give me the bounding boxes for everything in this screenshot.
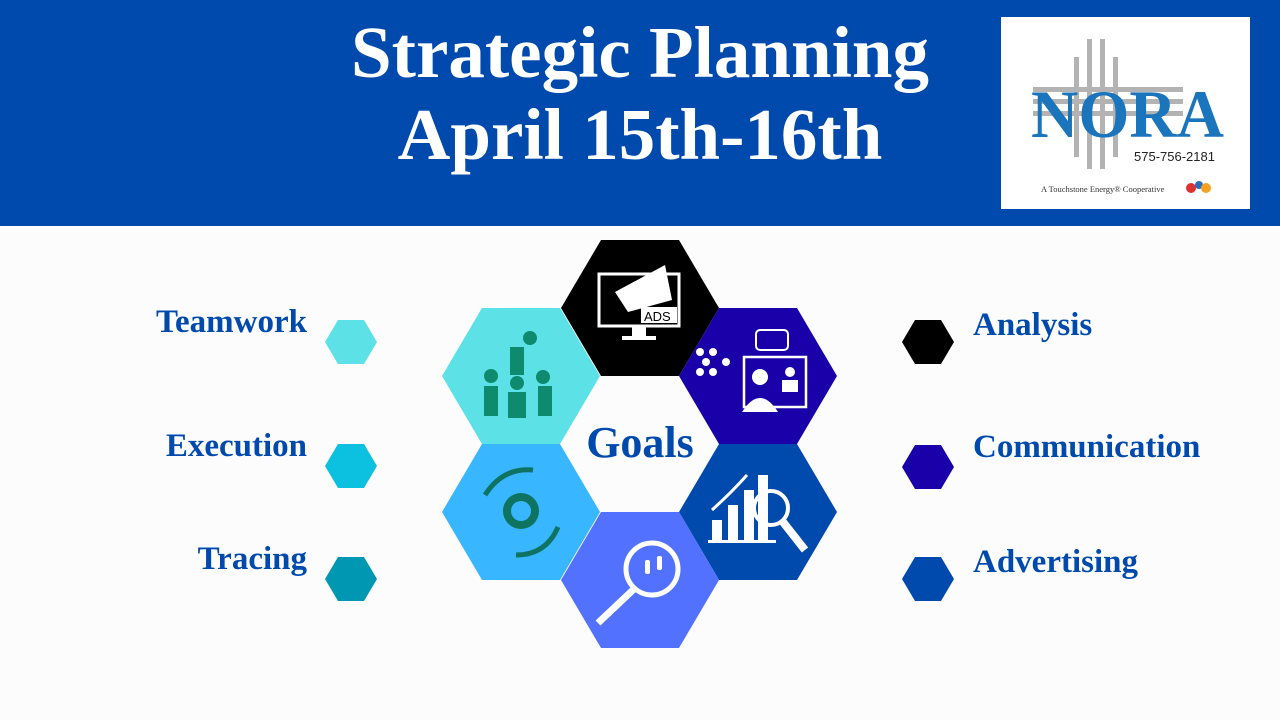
label: Teamwork: Teamwork xyxy=(156,304,307,340)
logo: NORA: NORA xyxy=(1031,76,1224,152)
logo: NORA xyxy=(1001,17,1250,209)
hex: execution xyxy=(442,444,600,580)
label: Communication: Communication xyxy=(973,429,1200,465)
hex: teamwork xyxy=(442,308,600,444)
header band xyxy=(0,0,1280,226)
hex: advertising (top) xyxy=(561,240,719,376)
title xyxy=(351,12,929,175)
hex: advertising (top): ADS xyxy=(644,309,671,324)
hex: analysis xyxy=(679,444,837,580)
small hex markers xyxy=(325,320,954,601)
label: Analysis: Analysis xyxy=(973,307,1092,343)
logo: NORA: 575-756-2181 xyxy=(1134,149,1215,164)
title: April 15th-16th xyxy=(398,94,882,175)
label: Advertising: Advertising xyxy=(973,544,1138,580)
title: Strategic Planning xyxy=(351,12,929,93)
hex: communication xyxy=(679,308,837,444)
label: Execution: Execution xyxy=(166,428,307,464)
logo: NORA: A Touchstone Energy® Cooperative xyxy=(1041,184,1165,194)
label: Tracing: Tracing xyxy=(198,541,307,577)
center text: Goals: Goals xyxy=(586,418,694,467)
hex: tracing xyxy=(561,512,719,648)
